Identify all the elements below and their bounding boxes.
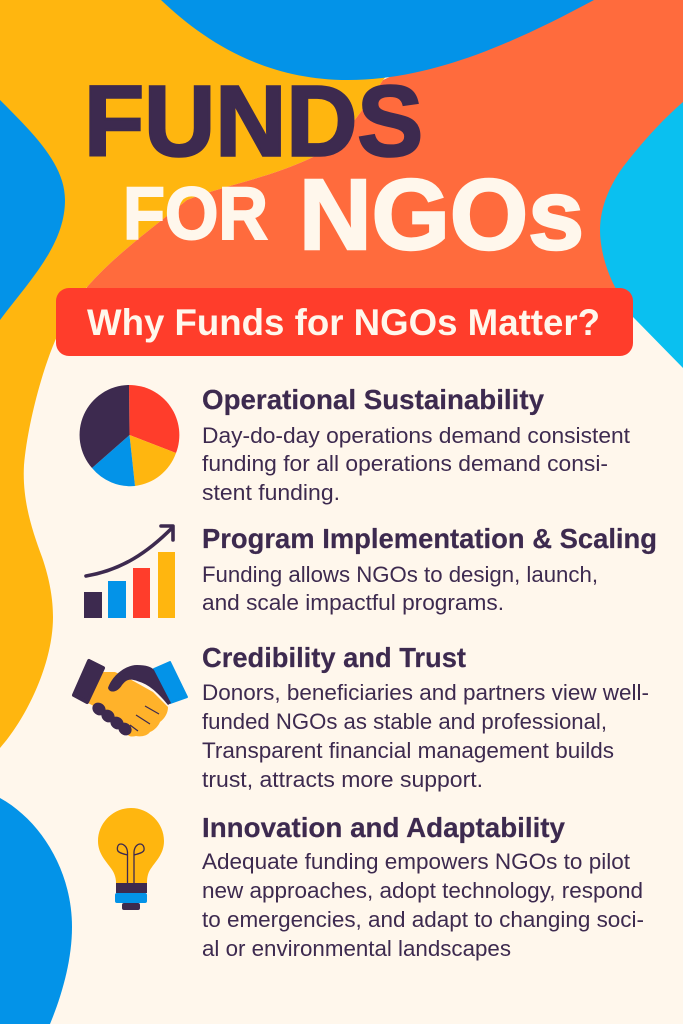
section: Innovation and Adaptability [202,812,644,961]
section: Operational Sustainability: Day-do-day operations demand consistent [202,423,631,448]
banner: Why Funds for NGOs Matter? [87,302,600,343]
section: Program Implementation & Scaling [202,523,657,615]
section: Credibility and Trust [202,642,649,792]
background: yellow shape [0,0,400,748]
background: top blue blob [161,0,594,80]
section: Innovation and Adaptability: new approaches, adopt technology, respond [202,878,643,903]
section: Credibility and Trust: funded NGOs as stable and professional, [202,709,607,734]
section: Innovation and Adaptability: to emergencies, and adapt to changing soci- [202,907,644,932]
section: Credibility and Trust: Credibility and Trust [202,642,466,673]
background: right cyan blob [600,102,683,368]
background: left blue blob [0,100,65,320]
section: Innovation and Adaptability: Innovation and Adaptability [202,812,566,843]
section: Credibility and Trust: Donors, beneficiaries and partners view well- [202,680,649,705]
title: NGOs: NGOs [299,159,584,271]
background: bottom blue blob [0,798,72,1024]
section: Innovation and Adaptability: al or environmental landscapes [202,936,511,961]
section: Program Implementation & Scaling: and scale impactful programs. [202,590,504,615]
section: Innovation and Adaptability: Adequate funding empowers NGOs to pilot [202,849,631,874]
icon: light bulb [98,808,164,910]
section: Program Implementation & Scaling: Funding allows NGOs to design, launch, [202,562,598,587]
section: Credibility and Trust: trust, attracts more support. [202,767,483,792]
section: Operational Sustainability [202,384,631,505]
icon: handshake [74,661,187,738]
banner [56,288,633,356]
section: Operational Sustainability: Operational Sustainability [202,384,545,415]
icon: pie chart [80,385,179,486]
background: orange field [70,0,683,340]
section: Program Implementation & Scaling: Program Implementation & Scaling [202,523,657,554]
title: FOR: FOR [123,172,268,255]
title: FUNDS: FUNDS [84,66,423,178]
icon: rising bar chart with arrow [84,526,175,618]
section: Operational Sustainability: funding for all operations demand consi- [202,451,608,476]
section: Operational Sustainability: stent funding. [202,480,340,505]
section: Credibility and Trust: Transparent financial management builds [202,738,614,763]
